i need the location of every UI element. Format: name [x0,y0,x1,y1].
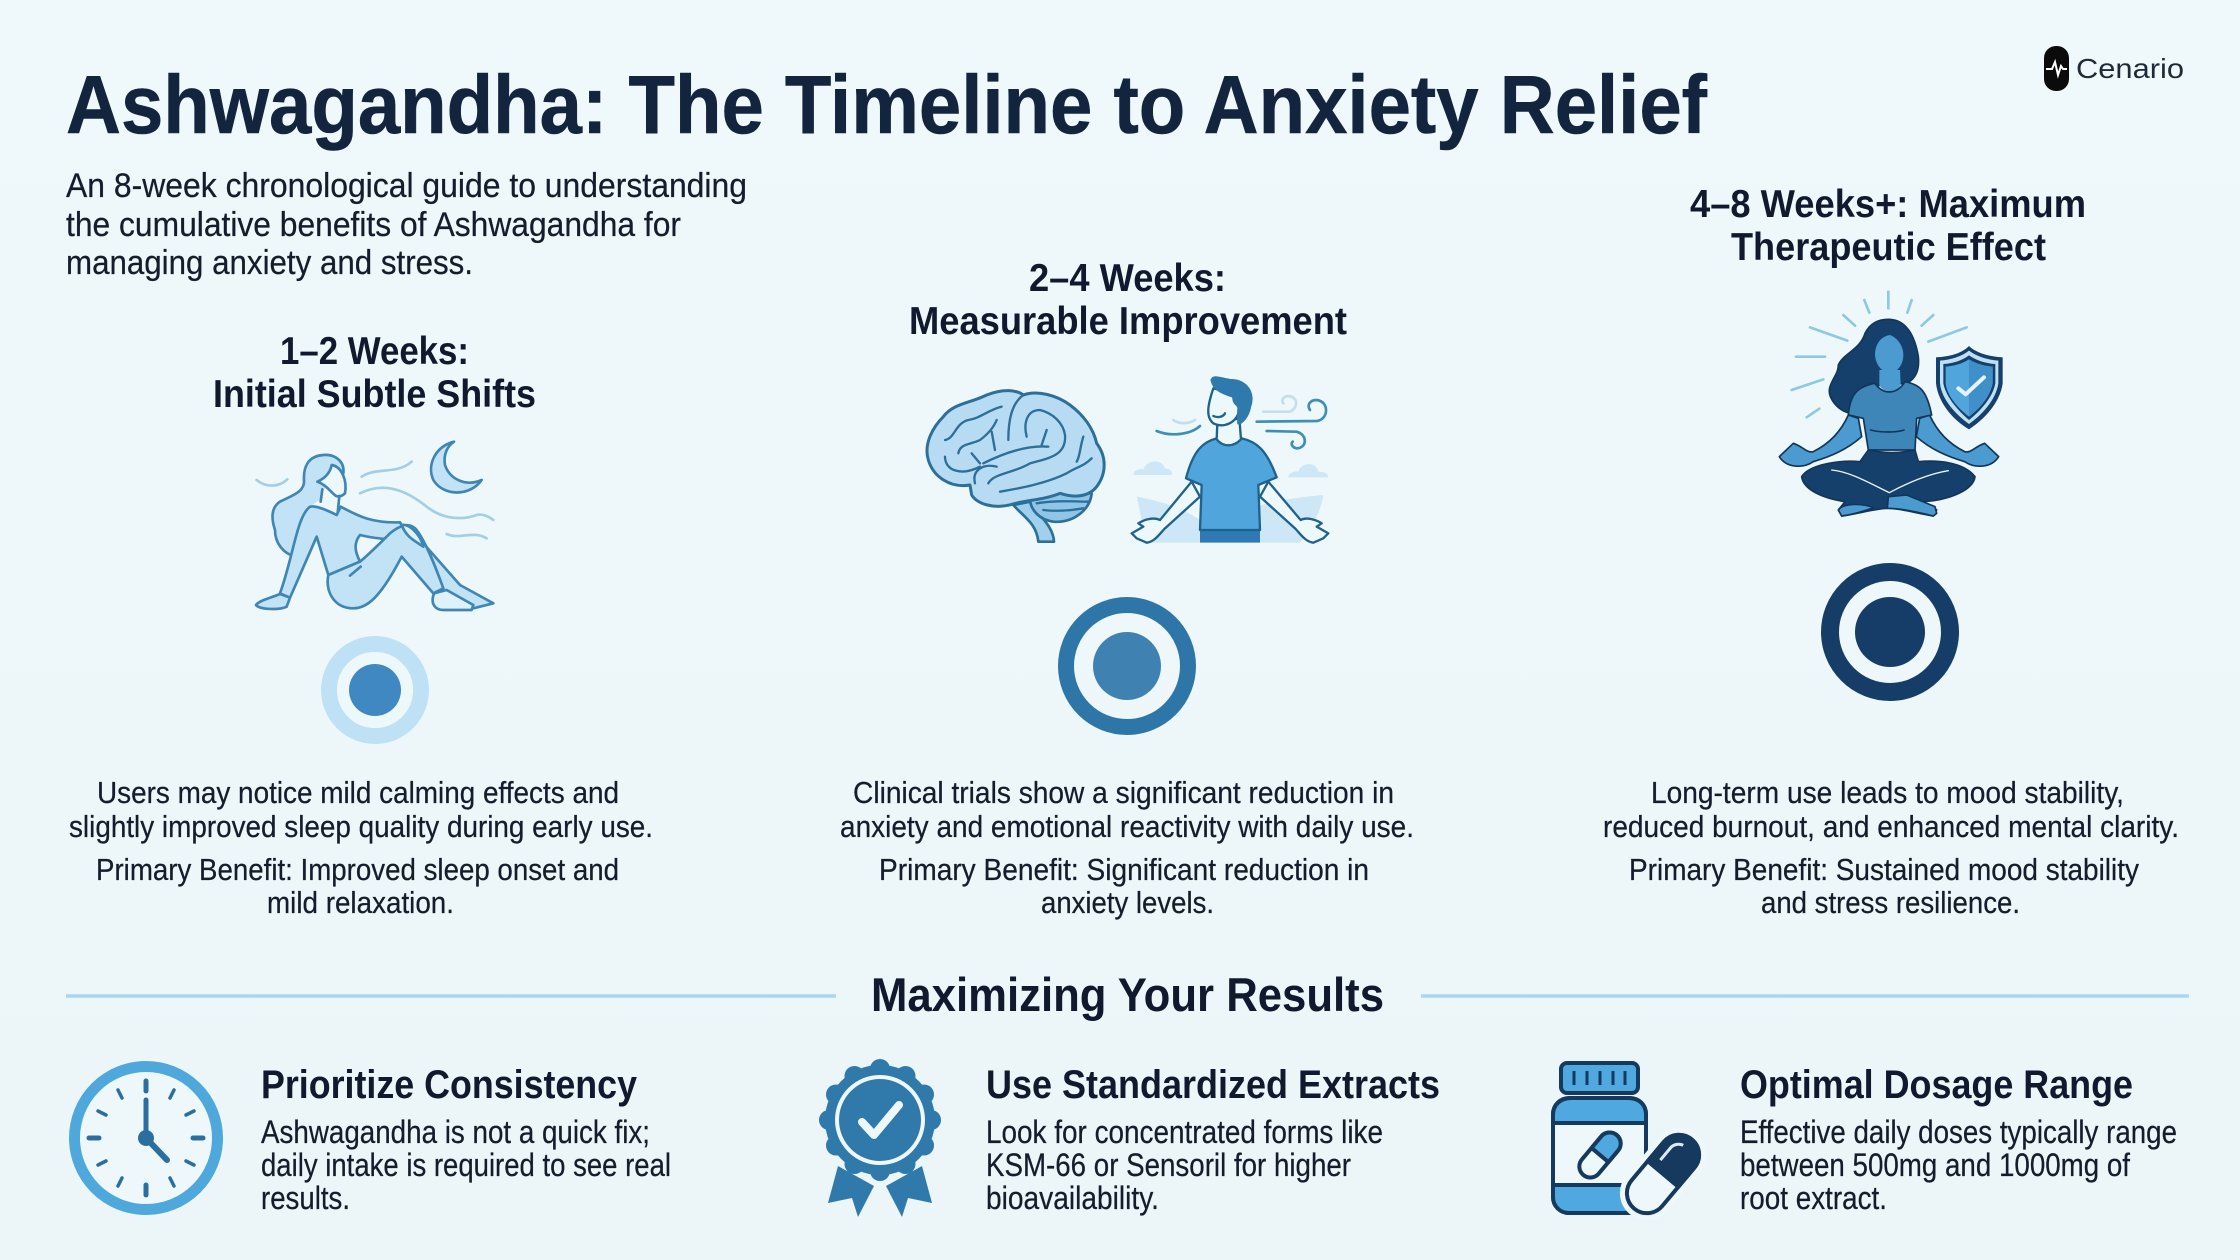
heading: use standardized extracts: Use Standardized Extracts [986,1063,1440,1107]
subtitle: An 8-week chronological guide to understanding [66,167,747,205]
description: 2–4 weeks [840,775,1414,920]
panel: prioritize consistency [74,1063,671,1216]
text: use standardized extracts: KSM-66 or Sensoril for higher [986,1147,1351,1183]
heading: 4–8 weeks: 4–8 Weeks+: Maximum [1690,183,2086,226]
icon: clock [74,1066,218,1210]
text: prioritize consistency: Ashwagandha is not a quick fix; [261,1114,650,1150]
heading: 2–4 weeks: 2–4 Weeks: [1029,257,1226,300]
icon: award rosette [819,1059,941,1217]
description: 2–4 weeks: Clinical trials show a significant reduction in [853,775,1394,810]
icon: woman meditating with shield [1779,292,2003,516]
icon: man breathing [1132,377,1328,543]
text: optimal dosage range [1740,1114,2177,1216]
subtitle [66,167,747,282]
logo: Cenario: Cenario [2076,53,2184,84]
description: 1–2 weeks: Users may notice mild calming effects and [97,775,619,810]
panel: 4–8 weeks [1603,183,2179,920]
heading: 4–8 weeks [1690,183,2086,269]
subtitle: managing anxiety and stress. [66,244,473,282]
description: 4–8 weeks: Long-term use leads to mood stability, [1651,775,2124,810]
text: use standardized extracts: Look for concentrated forms like [986,1114,1383,1150]
icon: supplement bottle and capsules [1553,1063,1707,1221]
progress marker: medium ring [1066,605,1188,727]
description: 4–8 weeks [1603,775,2179,920]
description: 4–8 weeks: and stress resilience. [1761,885,2020,920]
text: use standardized extracts: bioavailability. [986,1180,1159,1216]
description: 1–2 weeks [69,775,653,920]
text: optimal dosage range: root extract. [1740,1180,1887,1216]
heading: 1–2 weeks: Initial Subtle Shifts [213,373,536,416]
text: use standardized extracts [986,1114,1383,1216]
description: 2–4 weeks: Primary Benefit: Significant reduction in [879,852,1369,887]
section heading: maximizing your results: Maximizing Your Results [871,968,1384,1021]
heading: prioritize consistency: Prioritize Consistency [261,1063,638,1107]
heading: 1–2 weeks [213,330,536,416]
panel: optimal dosage range [1553,1063,2177,1221]
description: 1–2 weeks: slightly improved sleep quality during early use. [69,809,653,844]
panel: 1–2 weeks [69,330,653,920]
icon: woman resting with moon [256,442,493,610]
description: 4–8 weeks: Primary Benefit: Sustained mood stability [1629,852,2139,887]
text: prioritize consistency: results. [261,1180,350,1216]
panel: 2–4 weeks [840,257,1414,920]
description: 2–4 weeks: anxiety and emotional reactivity with daily use. [840,809,1414,844]
heading: 2–4 weeks: Measurable Improvement [909,300,1347,343]
description: 1–2 weeks: mild relaxation. [267,885,454,920]
progress marker: light ring [329,644,421,736]
text: optimal dosage range: between 500mg and 1000mg of [1740,1147,2130,1183]
heading: optimal dosage range: Optimal Dosage Range [1740,1063,2133,1107]
text: prioritize consistency: daily intake is required to see real [261,1147,671,1183]
heading: 2–4 weeks [909,257,1347,343]
text: prioritize consistency [261,1114,671,1216]
progress marker: dark ring [1830,572,1950,692]
description: 2–4 weeks: anxiety levels. [1041,885,1214,920]
description: 1–2 weeks: Primary Benefit: Improved sleep onset and [96,852,619,887]
icon: brain [927,391,1104,542]
description: 4–8 weeks: reduced burnout, and enhanced mental clarity. [1603,809,2179,844]
logo: Cenario [2044,46,2184,91]
heading: 4–8 weeks: Therapeutic Effect [1731,226,2046,269]
subtitle: the cumulative benefits of Ashwagandha for [66,206,681,244]
title: Ashwagandha: The Timeline to Anxiety Relief [66,58,1707,151]
text: optimal dosage range: Effective daily doses typically range [1740,1114,2177,1150]
panel: use standardized extracts [819,1059,1440,1217]
heading: 1–2 weeks: 1–2 Weeks: [280,330,469,373]
